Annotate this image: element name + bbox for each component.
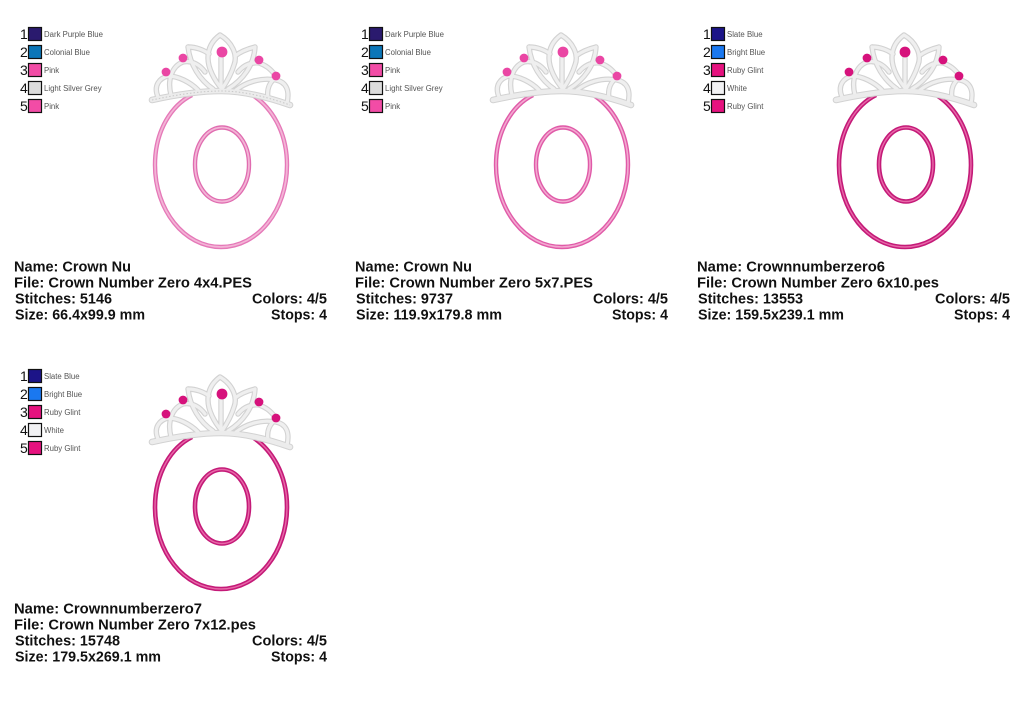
color legend: Pink bbox=[44, 66, 59, 75]
color legend: Ruby Glint bbox=[44, 444, 81, 453]
crown bbox=[836, 35, 974, 105]
design details: Stitches: 5146 bbox=[15, 292, 112, 308]
design details bbox=[697, 260, 1010, 324]
color legend: 4 bbox=[703, 80, 711, 96]
color legend: 3 bbox=[20, 62, 28, 78]
color legend: 3 bbox=[20, 404, 28, 420]
color legend: 5 bbox=[361, 98, 369, 114]
color legend: White bbox=[44, 426, 64, 435]
design details: Colors: 4/5 bbox=[593, 292, 668, 308]
panel: 6x10 design bbox=[697, 26, 1010, 324]
design details: Stitches: 13553 bbox=[698, 292, 803, 308]
color legend: 4 bbox=[361, 80, 369, 96]
color legend: Dark Purple Blue bbox=[385, 30, 444, 39]
color legend: 3 bbox=[361, 62, 369, 78]
design details: Stops: 4 bbox=[612, 308, 668, 324]
color legend: 2 bbox=[20, 44, 28, 60]
design details: Size: 159.5x239.1 mm bbox=[698, 308, 844, 324]
number zero outline bbox=[155, 437, 287, 589]
color legend: 4 bbox=[20, 80, 28, 96]
color legend: Pink bbox=[385, 66, 400, 75]
design details: Name: Crownnumberzero7 bbox=[14, 602, 202, 618]
design details: Colors: 4/5 bbox=[252, 292, 327, 308]
color legend bbox=[20, 368, 82, 456]
crown bbox=[152, 35, 290, 105]
design details bbox=[355, 260, 668, 324]
design details: Name: Crown Nu bbox=[14, 260, 131, 276]
design details: Size: 119.9x179.8 mm bbox=[356, 308, 502, 324]
design details: File: Crown Number Zero 4x4.PES bbox=[14, 276, 252, 292]
design details: Stitches: 15748 bbox=[15, 634, 120, 650]
design details bbox=[14, 602, 327, 666]
design details: Size: 66.4x99.9 mm bbox=[15, 308, 145, 324]
panel: 7x12 design bbox=[14, 368, 327, 666]
color legend: 1 bbox=[20, 368, 28, 384]
color legend: Ruby Glint bbox=[44, 408, 81, 417]
color legend: Bright Blue bbox=[727, 48, 765, 57]
color legend: Bright Blue bbox=[44, 390, 82, 399]
color legend: 3 bbox=[703, 62, 711, 78]
color legend bbox=[20, 26, 103, 114]
crown bbox=[152, 377, 290, 447]
color legend: 2 bbox=[361, 44, 369, 60]
number zero outline bbox=[839, 95, 971, 247]
color legend: 5 bbox=[20, 98, 28, 114]
design details: Stops: 4 bbox=[271, 650, 327, 666]
color legend: 1 bbox=[703, 26, 711, 42]
number zero outline bbox=[496, 95, 628, 247]
color legend: Colonial Blue bbox=[44, 48, 90, 57]
color legend: 1 bbox=[361, 26, 369, 42]
color legend: Pink bbox=[44, 102, 59, 111]
color legend: 1 bbox=[20, 26, 28, 42]
design details: File: Crown Number Zero 5x7.PES bbox=[355, 276, 593, 292]
color legend: Colonial Blue bbox=[385, 48, 431, 57]
color legend: Slate Blue bbox=[727, 30, 763, 39]
crown bbox=[493, 35, 631, 105]
color legend: Light Silver Grey bbox=[44, 84, 102, 93]
design details: Stops: 4 bbox=[954, 308, 1010, 324]
color legend: 2 bbox=[20, 386, 28, 402]
color legend: Dark Purple Blue bbox=[44, 30, 103, 39]
design details: Colors: 4/5 bbox=[935, 292, 1010, 308]
color legend: 2 bbox=[703, 44, 711, 60]
color legend: Ruby Glint bbox=[727, 102, 764, 111]
design details: Name: Crown Nu bbox=[355, 260, 472, 276]
color legend: 4 bbox=[20, 422, 28, 438]
color legend: 5 bbox=[703, 98, 711, 114]
panel: 5x7 design bbox=[355, 26, 668, 324]
color legend: Pink bbox=[385, 102, 400, 111]
color legend bbox=[703, 26, 765, 114]
panel: 4x4 design bbox=[14, 26, 327, 324]
color legend: Slate Blue bbox=[44, 372, 80, 381]
color legend: 5 bbox=[20, 440, 28, 456]
design details: Stops: 4 bbox=[271, 308, 327, 324]
design details: Name: Crownnumberzero6 bbox=[697, 260, 885, 276]
color legend bbox=[361, 26, 444, 114]
design details: File: Crown Number Zero 6x10.pes bbox=[697, 276, 939, 292]
color legend: Light Silver Grey bbox=[385, 84, 443, 93]
color legend: Ruby Glint bbox=[727, 66, 764, 75]
design details: Size: 179.5x269.1 mm bbox=[15, 650, 161, 666]
design details: Stitches: 9737 bbox=[356, 292, 453, 308]
number zero outline bbox=[155, 95, 287, 247]
design details: File: Crown Number Zero 7x12.pes bbox=[14, 618, 256, 634]
design details: Colors: 4/5 bbox=[252, 634, 327, 650]
design details bbox=[14, 260, 327, 324]
color legend: White bbox=[727, 84, 747, 93]
